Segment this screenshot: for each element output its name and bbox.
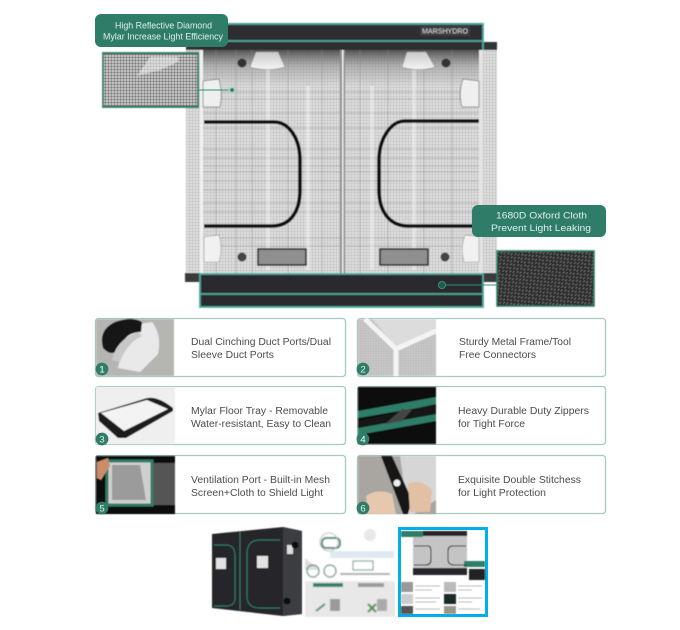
outer frame mesh columns (185, 42, 498, 282)
card 6 text: Exquisite Double Stitchess (458, 475, 581, 486)
callout: oxford cloth: 1680D Oxford Cloth (496, 210, 587, 222)
card 6 photo (358, 456, 436, 514)
card 1 badge: 1 (99, 364, 105, 376)
card 3 photo (96, 387, 175, 444)
card 3 badge: 3 (99, 434, 105, 446)
card 5: ventilation port (96, 456, 346, 514)
door zipper arch left (204, 122, 300, 226)
callout: diamond mylar: Mylar Increase Light Efficiency (103, 32, 223, 42)
card 5 badge (96, 502, 108, 514)
card 4 badge: 4 (360, 434, 366, 446)
card 6 badge: 6 (360, 504, 366, 514)
card 5 photo (96, 456, 175, 514)
pointer: oxford (438, 281, 497, 289)
card 2: metal frame (357, 318, 606, 376)
callout: oxford cloth: Prevent Light Leaking (491, 223, 591, 234)
card 1 badge (96, 363, 108, 376)
card 4 photo (358, 387, 436, 444)
card 1 text: Dual Cinching Duct Ports/Dual (191, 337, 331, 348)
swatch: mylar close-up (103, 53, 198, 107)
top fabric band (200, 23, 483, 50)
card 6 badge (357, 502, 369, 514)
card 5 badge: 5 (99, 504, 105, 514)
card 2 text (459, 337, 571, 361)
card 4 text: Heavy Durable Duty Zippers (458, 406, 589, 417)
brand logo: MARSHYDRO (422, 28, 469, 36)
card 6 text (458, 475, 581, 499)
thumbnail 3: selected current sheet (400, 528, 486, 616)
card 6: stitching (357, 456, 606, 514)
card 2 badge: 2 (360, 364, 366, 376)
card 3 text (191, 406, 331, 430)
door zipper arch right (379, 121, 479, 226)
card 3 badge (96, 433, 108, 446)
card 5 text (191, 475, 330, 499)
card 2 text: Free Connectors (459, 350, 536, 361)
card 1: duct ports (96, 318, 346, 376)
card 1 text (191, 337, 331, 361)
bottom fabric band (200, 274, 483, 307)
card 4 text (458, 406, 589, 430)
duct ports (203, 52, 479, 262)
card 2 badge (357, 363, 369, 376)
card 4 badge (357, 433, 369, 446)
card 5 text: Screen+Cloth to Shield Light (191, 488, 323, 499)
pointer: mylar (198, 86, 236, 94)
card 1 photo (96, 319, 174, 376)
callout: oxford cloth (472, 205, 606, 237)
thumbnail 1: tent product (212, 527, 302, 616)
swatch: oxford weave (497, 251, 594, 306)
callout: diamond mylar: High Reflective Diamond (115, 20, 212, 32)
vent windows (258, 249, 428, 265)
card 3 text: Water-resistant, Easy to Clean (191, 419, 331, 430)
card 3 text: Mylar Floor Tray - Removable (191, 406, 328, 417)
card 4: zippers (357, 386, 606, 446)
tent interior panels (203, 50, 479, 274)
card 1 text: Sleeve Duct Ports (191, 350, 274, 361)
thumbnail 2: detail sheet (305, 527, 395, 617)
card 2 text: Sturdy Metal Frame/Tool (459, 337, 571, 348)
card 2 photo (358, 319, 436, 376)
card 3: floor tray (96, 386, 346, 446)
card 4 text: for Tight Force (458, 419, 525, 430)
card 5 text: Ventilation Port - Built-in Mesh (191, 475, 330, 486)
card 6 text: for Light Protection (458, 488, 546, 499)
tent diagram (185, 23, 498, 307)
callout: diamond mylar (95, 14, 228, 47)
